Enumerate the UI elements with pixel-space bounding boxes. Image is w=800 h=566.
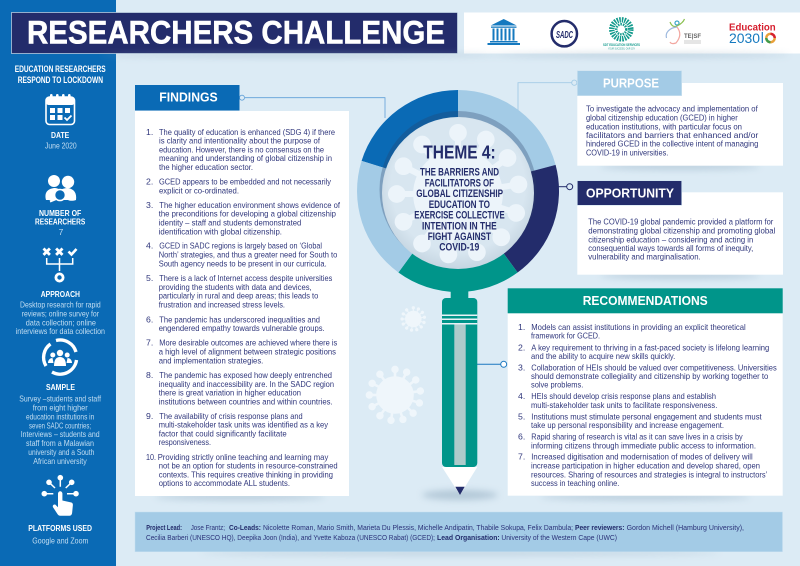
findings list: frustration and increased stress levels. <box>159 299 285 309</box>
recommendations list: and the ability to acquire new skills quickly. <box>531 351 675 361</box>
date label: June 2020 <box>45 140 77 150</box>
recommendations list: 5. <box>518 411 525 421</box>
findings list: institutions between countries and within countries. <box>159 396 333 406</box>
findings list: 9. <box>146 411 153 421</box>
recommendations list <box>518 322 777 488</box>
sample label: education institutions in <box>26 411 95 421</box>
purpose text: COVID-19 in universities. <box>586 148 668 158</box>
findings list: factor that could significantly facilitate <box>159 428 287 438</box>
recommendations list: 4. <box>518 391 525 401</box>
findings list: contexts. This requires creative thinking in providing <box>159 469 333 479</box>
credits text: University of the Western Cape (UWC) <box>501 533 617 542</box>
ring segment: light blue left <box>357 161 417 272</box>
recommendations list: success in teaching online. <box>531 478 619 488</box>
findings list: particularly in rural and deep areas; this leads to <box>159 291 318 301</box>
logo: SDT education services: SDT EDUCATION SERVICES <box>603 43 640 47</box>
date label: DATE <box>51 130 70 140</box>
findings list: There is a lack of Internet access despite universities <box>159 273 333 283</box>
credits text: Jose Frantz; <box>191 523 225 532</box>
findings list: North’ strategies, and thus a greater need for South to <box>159 249 337 259</box>
panel: purpose <box>577 71 783 166</box>
ring segment: teal <box>398 248 518 292</box>
findings list: 3. <box>146 200 153 210</box>
magnifying glass and pencil graphic <box>357 90 559 500</box>
findings list: 6. <box>146 314 153 324</box>
credits text <box>146 523 744 542</box>
theme text: GLOBAL CITIZENSHIP <box>416 188 503 200</box>
recommendations heading: RECOMMENDATIONS <box>583 293 708 308</box>
theme text: INTENTION IN THE <box>422 220 497 232</box>
sample label: from eight higher <box>33 402 88 412</box>
ring segment: light blue right <box>458 90 556 173</box>
panel: recommendations <box>508 288 783 496</box>
ring inner shadow <box>380 111 536 268</box>
opportunity text: citizenship education – considering and acting in <box>588 234 753 244</box>
sidebar panel: study overview <box>0 0 116 566</box>
connector: purpose to ring <box>518 80 577 120</box>
theme text: EDUCATION TO <box>429 199 490 211</box>
logo: TESF: TE|SF <box>684 33 701 40</box>
recommendations list: Institutions must stimulate personal engagement and students must <box>531 411 762 421</box>
ring segment: navy <box>499 165 559 272</box>
sample label: staff from a Malawian <box>26 438 94 448</box>
findings list: is clarity and intentionality about the purpose of <box>159 136 321 146</box>
purpose text: global citizenship education (GCED) in higher <box>586 112 738 122</box>
findings list: inequality and inaccessibility are. In the SADC region <box>159 379 334 389</box>
recommendations list: Rapid sharing of research is vital as it can save lives in a crisis by <box>531 432 743 442</box>
recommendations list: Models can assist institutions in providing an explicit theoretical <box>531 322 746 332</box>
panel: findings <box>135 85 349 496</box>
recommendations list: Increased digitisation and modernisation of modes of delivery will <box>531 452 753 462</box>
approach label: Desktop research for rapid <box>20 299 101 309</box>
panel soft shadows <box>100 53 790 555</box>
findings list: education. However, there is no consensus on the <box>159 144 324 154</box>
credits text: Co-Leads: <box>229 523 261 532</box>
purpose heading <box>577 71 682 96</box>
recommendations list: 2. <box>518 342 525 352</box>
icon: platforms hand tapping <box>42 475 79 516</box>
number of researchers label: NUMBER OF <box>39 208 81 218</box>
credits text: Cecilia Barberi (UNESCO HQ), Deepika Joon (India), and Yvette Kaboza (UNESCO Rabat) (GCED); <box>146 533 435 542</box>
logo strip <box>464 12 800 54</box>
credits text: Peer reviewers: <box>575 523 624 532</box>
findings list: not be an option for students in resource-constrained <box>159 461 338 471</box>
sample label <box>19 382 102 466</box>
findings list: The pandemic has exposed how deeply entrenched <box>159 370 332 380</box>
opportunity heading <box>577 181 682 205</box>
opportunity text <box>588 217 775 262</box>
approach label: reviews; online survey for <box>22 308 99 318</box>
panel: opportunity <box>577 181 783 275</box>
connector: findings to ring <box>240 95 385 118</box>
opportunity text: vulnerability and marginalisation. <box>588 252 701 262</box>
findings list: identity – staff and students demonstrated <box>159 217 301 227</box>
findings list: a high level of alignment between strategic positions <box>159 347 337 357</box>
findings list: The higher education environment shows evidence of <box>159 200 341 210</box>
approach label: interviews for data collection <box>16 326 105 336</box>
sidebar heading: EDUCATION RESEARCHERS <box>15 64 106 75</box>
ring segment: blue <box>362 90 458 170</box>
icon: researchers with magnifier <box>45 175 76 202</box>
findings list: engendered empathy towards vulnerable groups. <box>159 323 325 333</box>
findings list: providing the students with data and devices, <box>159 282 312 292</box>
recommendations list: A key requirement to thriving in a fast-paced society is lifelong learning <box>531 342 769 352</box>
icon: approach decision tree <box>44 248 76 281</box>
number of researchers label <box>35 208 85 237</box>
findings list: 1. <box>146 127 153 137</box>
theme text: THE BARRIERS AND <box>420 166 499 178</box>
sidebar heading: RESPOND TO LOCKDOWN <box>18 75 103 86</box>
sample label: seven SADC countries; <box>29 420 91 430</box>
decorative virus large <box>366 366 425 425</box>
sidebar heading <box>15 64 106 86</box>
icon: sample people in a cycle <box>44 340 76 374</box>
findings list: the higher education sector. <box>159 162 253 172</box>
recommendations list: 7. <box>518 452 525 462</box>
theme text: EXERCISE COLLECTIVE <box>414 210 505 222</box>
recommendations heading <box>508 288 783 313</box>
connector: opportunity to ring <box>556 184 573 190</box>
logo: UNESCO temple <box>488 19 520 45</box>
findings list: meaning and understanding of global citizenship in <box>159 153 332 163</box>
findings list: GCED appears to be embedded and not necessarily <box>159 176 332 186</box>
findings list: and implementation strategies. <box>159 355 263 365</box>
magnifier lens <box>382 117 534 269</box>
logo: SADC: SADC <box>556 29 573 41</box>
findings list: 10. <box>146 452 156 462</box>
theme text: THEME 4: <box>423 141 496 162</box>
logo: Education 2030 <box>729 22 776 46</box>
credits text: Lead Organisation: <box>437 533 500 542</box>
purpose heading: PURPOSE <box>603 76 659 91</box>
theme text <box>414 141 505 254</box>
pencil body <box>422 285 498 500</box>
sample label: Interviews – students and <box>21 429 100 439</box>
recommendations list: framework for GCED. <box>531 331 600 341</box>
platforms label: PLATFORMS USED <box>28 523 92 533</box>
decorative virus small <box>400 306 426 332</box>
findings list: the preconditions for developing a global citizenship <box>159 209 336 219</box>
recommendations list: multi-stakeholder task units to facilitate responsiveness. <box>531 400 717 410</box>
logo: Education 2030: Education <box>729 22 776 34</box>
recommendations list: increase participation in higher education and develop shared, open <box>531 460 760 470</box>
credits bar <box>135 512 782 552</box>
connector: pencil to recommendations <box>477 361 507 367</box>
theme text: FIGHT AGAINST <box>428 231 491 243</box>
findings heading: FINDINGS <box>159 90 218 105</box>
sample label: university and a South <box>28 447 95 457</box>
theme text: COVID-19 <box>439 242 479 254</box>
purpose text: hindered GCED in the collective intent of managing <box>586 139 758 149</box>
recommendations list: should demonstrate collegiality and citizenship by working together to <box>531 371 768 381</box>
findings list: there is great variation in higher education <box>159 388 301 398</box>
sample label: SAMPLE <box>46 382 75 392</box>
credits text: Project Lead: <box>146 523 182 532</box>
findings list: Providing strictly online teaching and learning may <box>158 452 329 462</box>
findings list: 4. <box>146 241 153 251</box>
findings list: The availability of crisis response plans and <box>159 411 303 421</box>
approach label: APPROACH <box>41 289 80 299</box>
findings list: More desirable outcomes are achieved where there is <box>159 338 338 348</box>
date label <box>45 130 77 150</box>
recommendations list: 1. <box>518 322 525 332</box>
logo: SDT education services <box>603 20 640 50</box>
number of researchers label: RESEARCHERS <box>35 216 85 226</box>
purpose text: facilitators and barriers that enhanced and/or <box>586 130 758 140</box>
findings list: 2. <box>146 176 153 186</box>
platforms label: Google and Zoom <box>32 536 88 546</box>
sample label: Survey –students and staff <box>19 394 102 404</box>
theme text: FACILITATORS OF <box>425 177 494 189</box>
logo: SADC <box>552 21 577 46</box>
findings list: The pandemic has underscored inequalities and <box>159 314 320 324</box>
findings heading <box>135 85 240 110</box>
findings list: The quality of education is enhanced (SDG 4) if there <box>159 127 335 137</box>
approach label: data collection; online <box>26 317 96 327</box>
opportunity text: consequential ways towards all forms of inequity, <box>588 243 753 253</box>
purpose text <box>586 104 758 158</box>
findings list: 5. <box>146 273 153 283</box>
findings list: explicit or co-ordinated. <box>159 185 239 195</box>
findings list: 8. <box>146 370 153 380</box>
recommendations list: HEIs should develop crisis response plans and establish <box>531 391 716 401</box>
sample label: African university <box>33 456 87 466</box>
recommendations list: 3. <box>518 362 525 372</box>
credits text: Gordon Michell (Hamburg University), <box>627 523 744 532</box>
findings list: South agency needs to be present in our curricula. <box>159 258 327 268</box>
number of researchers label: 7 <box>59 227 64 237</box>
recommendations list: resources. Sharing of resources and strategies is integral to instructors’ <box>531 469 767 479</box>
findings list: 7. <box>146 338 153 348</box>
purpose text: education institutions, with particular focus on <box>586 121 742 131</box>
logo: SDT education services: YOUR SUCCESS, OUR JOY <box>608 46 635 50</box>
opportunity text: The COVID-19 global pandemic provided a platform for <box>588 217 773 227</box>
recommendations list: informing citizens through immediate public access to information. <box>531 440 756 450</box>
logo: Education 2030: 2030 <box>729 31 760 46</box>
findings list: multi-stakeholder task units was identified as a key <box>159 420 329 430</box>
title banner: RESEARCHERS CHALLENGE <box>27 14 445 50</box>
findings list: identification with global citizenship. <box>159 226 282 236</box>
findings list: options to accommodate ALL students. <box>159 478 290 488</box>
findings list: GCED in SADC regions is largely based on ‘Global <box>159 241 322 251</box>
purpose text: To investigate the advocacy and implementation of <box>586 104 758 114</box>
opportunity heading: OPPORTUNITY <box>586 185 674 200</box>
lens virus <box>388 124 529 265</box>
platforms label <box>28 523 92 546</box>
recommendations list: take up personal responsibility and increase engagement. <box>531 420 724 430</box>
logo: TESF <box>666 19 701 44</box>
recommendations list: solve problems. <box>531 380 583 390</box>
findings list: responsiveness. <box>159 437 211 447</box>
approach label <box>16 289 105 336</box>
icon: calendar <box>46 94 74 124</box>
opportunity text: demonstrating global citizenship and promoting global <box>588 226 775 236</box>
findings list <box>146 127 341 488</box>
recommendations list: 6. <box>518 432 525 442</box>
credits text: Nicolette Roman, Mario Smith, Marieta Du Plessis, Michelle Andipatin, Thabile Sokupa, Felix Dambula; <box>263 523 573 532</box>
